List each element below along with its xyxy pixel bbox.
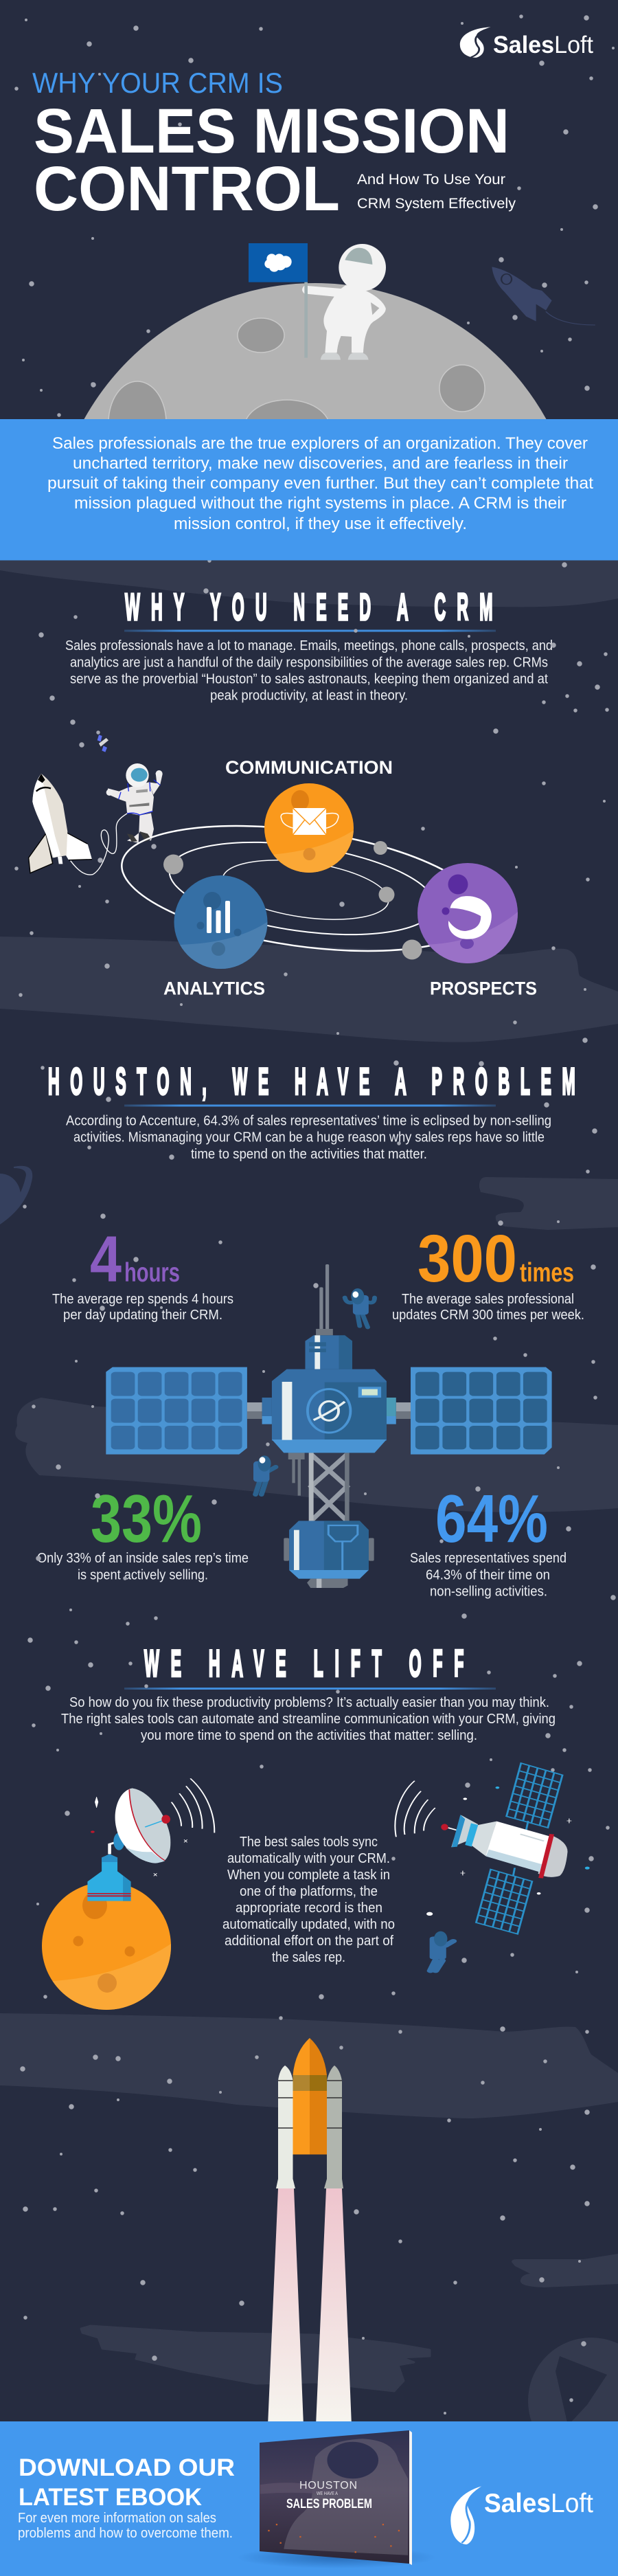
illustration: satellite: [395, 1763, 590, 1971]
text block: lift off: [61, 1695, 556, 1743]
satellite dish: [115, 1789, 170, 1863]
stat: 64 percent: [410, 1481, 566, 1600]
section heading: houston: HOUSTON, WE HAVE A PROBLEM: [48, 1060, 575, 1102]
icon: saturn silhouette: [0, 1166, 32, 1224]
stat: 4 hours: The average rep spends 4 hours: [52, 1292, 233, 1307]
antennas: [316, 1264, 333, 1335]
text block: sync: When you complete a task in: [227, 1868, 390, 1883]
planet: prospects: [417, 863, 518, 963]
title line one: SALES MISSION: [34, 96, 510, 166]
stat: 4 hours: per day updating their CRM.: [63, 1308, 222, 1323]
astronaut figure: [302, 244, 386, 360]
lower module: [284, 1521, 374, 1588]
title: [32, 67, 516, 224]
icon: tether: [71, 806, 139, 875]
text block: houston: time to spend on the activities that matter.: [191, 1147, 427, 1162]
sparkles: [95, 1797, 187, 1876]
side pods: [262, 1398, 396, 1424]
signal waves right: [395, 1781, 435, 1837]
subtitle: CRM System Effectively: [357, 196, 516, 212]
cover title: WE HAVE A: [317, 2491, 338, 2496]
text block: sync: appropriate record is then: [236, 1901, 382, 1916]
text block: sync: [222, 1835, 395, 1965]
ebook cover: [237, 2430, 436, 2568]
stat: 300 times: times: [520, 1258, 574, 1288]
subtitle: [357, 172, 516, 212]
stat: 300 times: [392, 1221, 584, 1323]
stat: 4 hours: 4: [90, 1223, 122, 1296]
text block: why you need a crm: peak productivity, at least in theory.: [210, 688, 408, 704]
dish tower: [87, 1833, 131, 1901]
stat: 4 hours: hours: [124, 1258, 180, 1288]
footer heading: LATEST EBOOK: [19, 2484, 202, 2511]
intro text: Sales professionals are the true explorers of an organization. They cover: [52, 434, 588, 453]
planet: analytics: [174, 875, 268, 969]
intro text: pursuit of taking their company even further. But they can’t complete that: [47, 474, 593, 493]
orbiting moons: [163, 841, 422, 959]
central body: [272, 1369, 387, 1453]
text block: sync: additional effort on the part of: [225, 1934, 393, 1949]
label: prospects: PROSPECTS: [430, 978, 537, 999]
solar grid upper: [507, 1763, 562, 1830]
section heading: why you need a crm: WHY YOU NEED A CRM: [125, 585, 493, 628]
label: communication: COMMUNICATION: [225, 757, 393, 778]
diagram: crm orbits: [114, 757, 537, 999]
icon: globe silhouette: [528, 2338, 618, 2464]
astronaut and flag: [249, 243, 386, 360]
cover title: [286, 2480, 372, 2511]
icon: upper astronaut: [345, 1288, 375, 1328]
panel connectors: [247, 1402, 411, 1419]
text block: why you need a crm: Sales professionals have a lot to manage. Emails, meetings, phone calls, prospects, and: [65, 638, 553, 653]
truss: [309, 1453, 350, 1521]
icon: floating astronaut: [430, 1931, 453, 1971]
icon: bar chart: [207, 901, 230, 933]
text block: sync: the sales rep.: [272, 1950, 345, 1965]
footer text: For even more information on sales: [18, 2510, 216, 2526]
orbit rings: [114, 806, 490, 971]
text block: sync: automatically updated, with no: [222, 1917, 395, 1932]
stat: 300 times: The average sales professional: [402, 1292, 574, 1307]
stat: 300 times: 300: [417, 1221, 517, 1296]
stat: 33 percent: is spent actively selling.: [78, 1568, 208, 1583]
text block: why you need a crm: analytics are just a handful of the daily responsibilities of the average sales rep. CRMs: [70, 656, 548, 671]
cover title: HOUSTON: [299, 2480, 357, 2491]
footer text: problems and how to overcome them.: [18, 2525, 233, 2541]
text block: houston: According to Accenture, 64.3% of sales representatives’ time is eclipsed by non-selling: [66, 1113, 551, 1128]
panel: footer band: [0, 2421, 618, 2576]
icon: tiny satellite: [98, 735, 108, 752]
stat: 64 percent: non-selling activities.: [430, 1584, 547, 1600]
planet: [41, 1882, 175, 2013]
subtitle: And How To Use Your: [357, 172, 505, 188]
cover astronaut: [260, 2439, 408, 2555]
illustration: shuttle, spacewalker and satellite: [29, 735, 163, 875]
icon: envelope: [281, 808, 339, 835]
planet emblem: [308, 1389, 350, 1433]
boosters: [276, 2065, 343, 2188]
stat: 4 hours: [52, 1223, 233, 1323]
text block: sync: one of the platforms, the: [240, 1884, 378, 1899]
illustration: space station: [106, 1264, 552, 1588]
footer text: [18, 2510, 233, 2541]
intro text: mission control, if they use it effectively.: [174, 515, 467, 533]
colored sparks: [426, 1787, 590, 1916]
text block: sync: automatically with your CRM.: [227, 1851, 390, 1866]
icon: spacewalking astronaut: [106, 763, 163, 843]
stat: 64 percent: 64%: [435, 1481, 548, 1556]
text block: sync: The best sales tools sync: [240, 1835, 378, 1850]
small lower antennas: [288, 1453, 305, 1496]
stat: 33 percent: Only 33% of an inside sales rep’s time: [37, 1551, 249, 1566]
cover title: SALES PROBLEM: [286, 2497, 372, 2511]
right solar panel: [411, 1367, 552, 1455]
moon craters: [108, 317, 485, 419]
stat: 33 percent: 33%: [91, 1481, 202, 1556]
moon: [84, 283, 547, 419]
icon: background rocket: [492, 267, 595, 325]
text block: lift off: So how do you fix these productivity problems? It’s actually easier than you may think.: [69, 1695, 549, 1710]
title kicker: WHY YOUR CRM IS: [32, 67, 283, 99]
text block: houston: [66, 1113, 551, 1162]
panel: intro band: [0, 419, 618, 561]
intro text: mission plagued without the right systems in place. A CRM is their: [74, 494, 566, 513]
footer heading: DOWNLOAD OUR: [19, 2454, 235, 2481]
illustration: orange planet with dish: [41, 1778, 214, 2013]
flag pole: [304, 282, 308, 358]
section heading: we have lift off: WE HAVE LIFT OFF: [144, 1642, 464, 1684]
stat: 64 percent: Sales representatives spend: [410, 1551, 566, 1566]
intro text: [47, 434, 593, 533]
intro text: uncharted territory, make new discoveries, and are fearless in their: [73, 454, 568, 473]
illustration: rocket launch: [268, 2038, 352, 2426]
logo: SalesLoft footer: [450, 2486, 593, 2544]
logo: SalesLoft header: SalesLoft: [493, 32, 593, 58]
icon: space shuttle: [29, 774, 92, 873]
satellite body: [441, 1815, 568, 1878]
flag: [249, 243, 308, 282]
title line two: CONTROL: [34, 154, 340, 224]
label: analytics: ANALYTICS: [163, 978, 265, 999]
stat: 64 percent: 64.3% of their time on: [426, 1568, 550, 1583]
text block: why you need a crm: [65, 638, 553, 704]
stat: 300 times: updates CRM 300 times per week.: [392, 1308, 584, 1323]
background clouds: [0, 550, 618, 2391]
text block: why you need a crm: serve as the proverbial “Houston” to sales astronauts, keeping them organized and at: [70, 672, 548, 687]
logo: SalesLoft header: [460, 27, 593, 58]
signal waves left: [172, 1778, 214, 1833]
footer heading: [19, 2454, 235, 2511]
solar grid lower: [476, 1868, 532, 1934]
stat: 33 percent: [37, 1481, 249, 1583]
left solar panel: [106, 1367, 247, 1455]
top module: [305, 1335, 352, 1369]
text block: houston: activities. Mismanaging your CRM can be a huge reason why sales reps have so little: [73, 1130, 545, 1145]
orange tank: [293, 2038, 327, 2155]
planet: communication: [264, 783, 354, 873]
text block: lift off: The right sales tools can automate and streamline communication with your CRM, giving: [61, 1712, 556, 1727]
icon: lower astronaut: [253, 1455, 276, 1494]
icon: crescent: [448, 896, 492, 939]
logo: SalesLoft footer: SalesLoft: [484, 2489, 593, 2518]
exhaust flames: [268, 2188, 352, 2426]
text block: lift off: you more time to spend on the activities that matter: selling.: [141, 1728, 477, 1743]
